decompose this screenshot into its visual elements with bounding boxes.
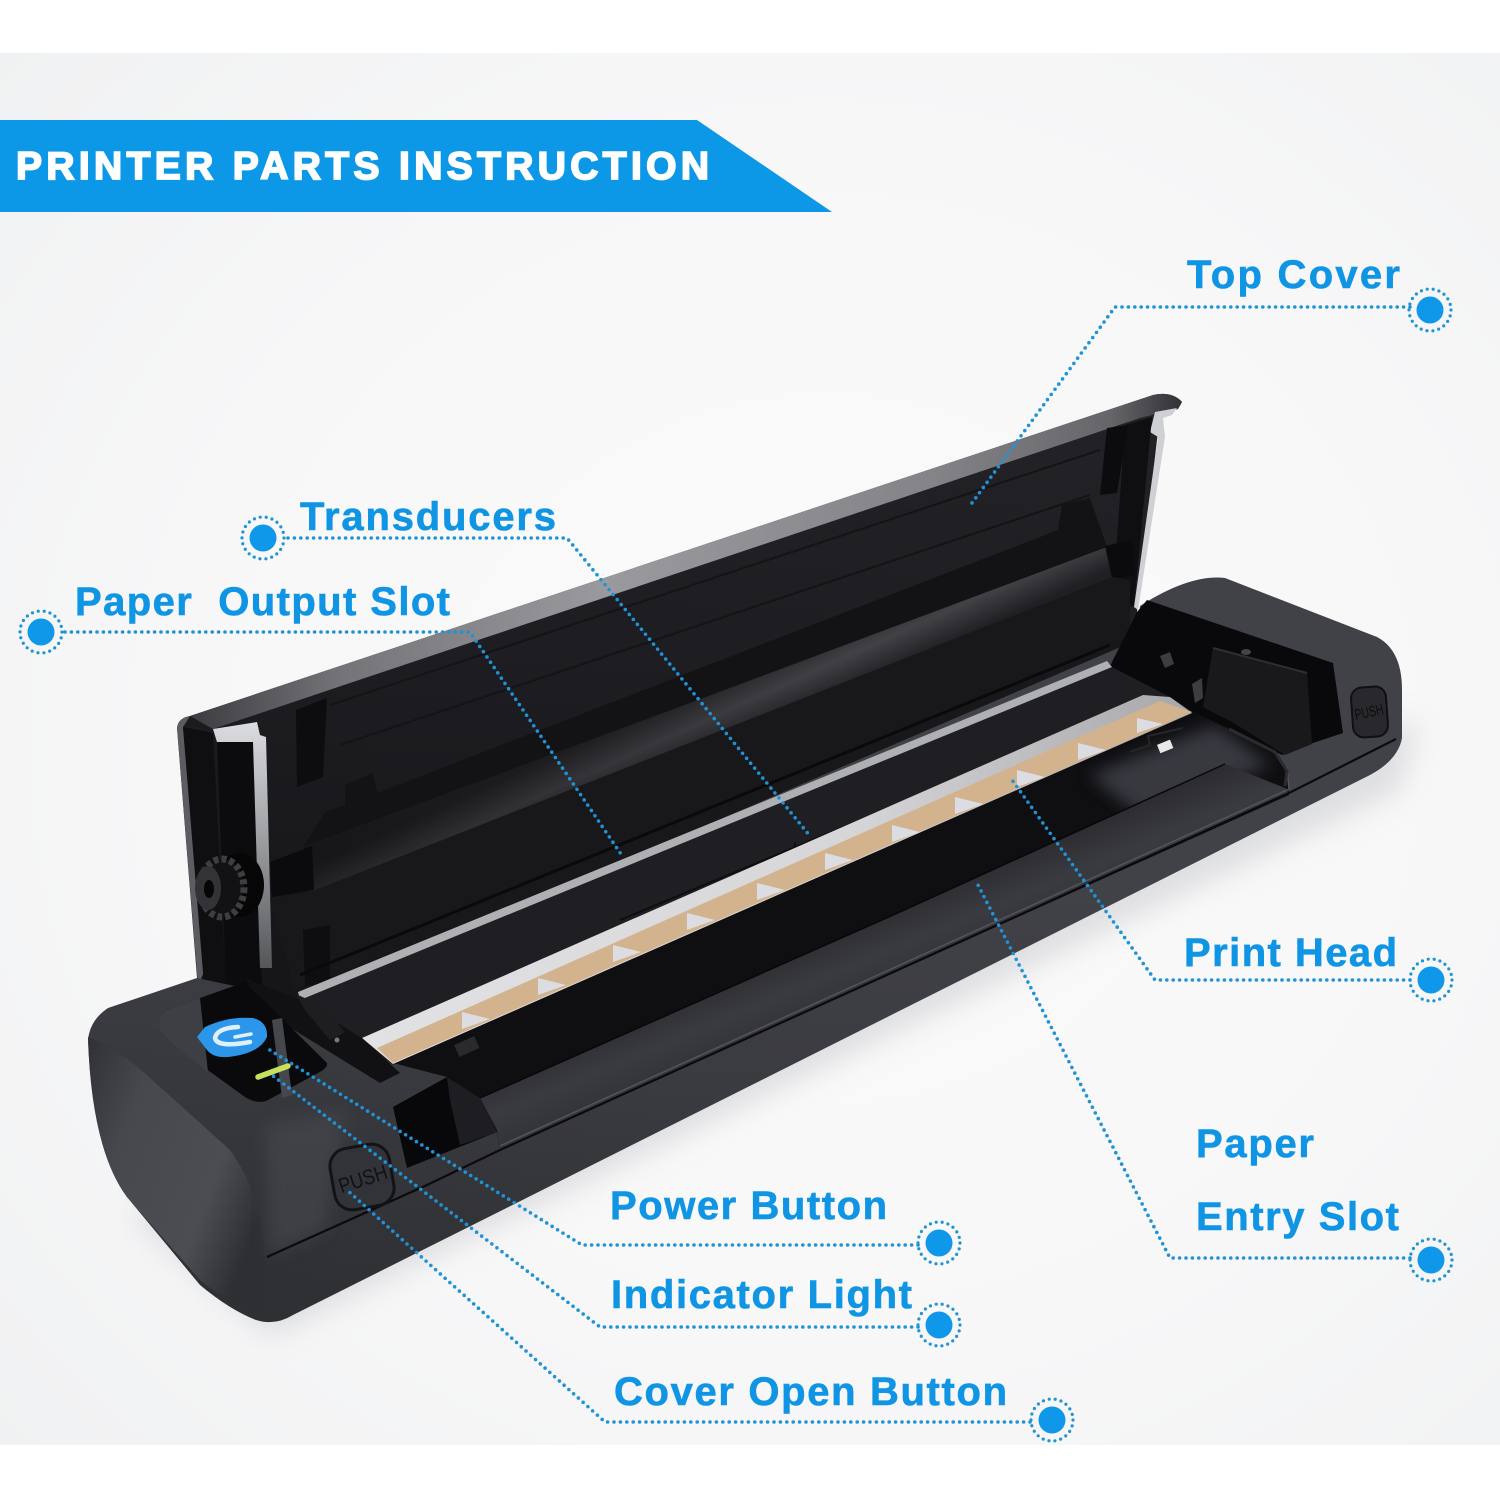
right push button xyxy=(1350,686,1389,738)
sensor chip xyxy=(1157,740,1173,753)
platen roller xyxy=(302,547,1112,892)
left hinge bracket xyxy=(213,722,272,968)
label: Paper Entry Slot: Paper xyxy=(1196,1122,1314,1166)
panel behind strip xyxy=(300,664,1175,1065)
silver guide bar xyxy=(298,661,1112,1000)
label: Cover Open Button xyxy=(347,1190,1073,1441)
left push button: PUSH xyxy=(336,1161,390,1198)
paper well xyxy=(393,712,1289,1150)
label: Print Head: Print Head xyxy=(1184,931,1397,975)
printer shadow xyxy=(130,720,1420,1335)
printer illustration xyxy=(88,394,1420,1335)
gear xyxy=(195,853,264,917)
print head triangles xyxy=(462,718,1163,1029)
strip clip xyxy=(454,1036,479,1057)
label: Paper Output Slot xyxy=(20,580,623,857)
open top cover xyxy=(177,394,1182,1005)
lid step band xyxy=(303,498,1107,847)
label: Top Cover xyxy=(972,253,1451,503)
label: Power Button: Power Button xyxy=(610,1184,887,1228)
title banner: PRINTER PARTS INSTRUCTION xyxy=(16,145,709,188)
label: Indicator Light xyxy=(272,1075,960,1346)
printer body xyxy=(88,578,1402,1322)
icon: indicator light xyxy=(258,1066,288,1077)
print head strip xyxy=(362,695,1192,1064)
left push button xyxy=(327,1141,397,1213)
label: Paper Entry Slot: Entry Slot xyxy=(1196,1195,1399,1239)
label: Paper Entry Slot xyxy=(978,885,1452,1281)
label: Top Cover: Top Cover xyxy=(1187,253,1400,297)
label: Transducers xyxy=(242,495,810,836)
body seam xyxy=(267,739,1396,1257)
hinge frame band xyxy=(245,978,400,1083)
left end cap xyxy=(88,1037,265,1315)
left wedge opening xyxy=(393,1077,497,1168)
title banner xyxy=(0,120,832,212)
lid rim xyxy=(190,394,1182,729)
label: Print Head xyxy=(1010,777,1452,1001)
right edge highlight xyxy=(1134,408,1177,610)
label: Indicator Light: Indicator Light xyxy=(611,1273,912,1317)
right push button: PUSH xyxy=(1353,701,1385,724)
lower lid xyxy=(270,577,1130,990)
label: Cover Open Button: Cover Open Button xyxy=(614,1370,1007,1414)
label: Power Button xyxy=(265,1047,960,1264)
icon: power button logo xyxy=(197,1018,267,1057)
label: Paper Output Slot: Paper Output Slot xyxy=(75,580,450,624)
corner highlight xyxy=(265,1110,345,1255)
right housing block xyxy=(1110,600,1343,786)
control panel xyxy=(158,982,327,1102)
front plate xyxy=(480,764,1289,1150)
well sheen xyxy=(1090,725,1270,815)
lid slots xyxy=(296,698,327,787)
lid ridge lines xyxy=(330,450,1100,745)
label: Transducers: Transducers xyxy=(300,495,556,539)
